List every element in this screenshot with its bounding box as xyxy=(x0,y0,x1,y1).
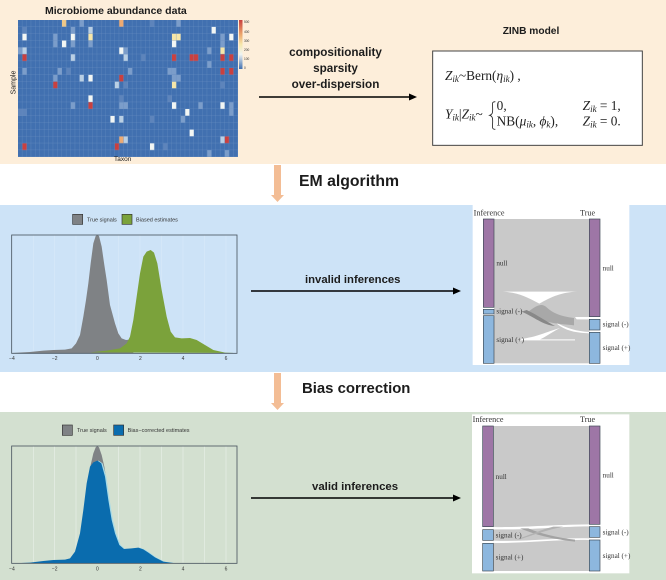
sankey: inference vs truth, valid: Inference xyxy=(473,415,504,424)
equation box: ZINB model: ik xyxy=(526,119,534,129)
equation box: ZINB model: Z xyxy=(583,113,591,128)
sankey: inference vs truth, invalid: True xyxy=(580,208,595,217)
density chart: true signals vs biased estimates: −2 xyxy=(52,356,58,362)
label: invalid inferences: invalid inferences xyxy=(305,274,400,286)
density chart: true signals vs biased estimates: 0 xyxy=(96,356,99,362)
heatmap colour legend: 200 xyxy=(244,48,250,52)
sankey: inference vs truth, valid: signal (+) xyxy=(603,552,631,560)
equation box: ZINB model: Z xyxy=(462,107,470,122)
sankey: inference vs truth, invalid: signal (-) xyxy=(603,321,629,329)
equation box: ZINB model: ) , xyxy=(510,68,521,83)
arrow: to valid inferences xyxy=(251,494,461,502)
sankey: inference vs truth, invalid: signal (-) xyxy=(496,308,523,316)
density chart: true signals vs bias-corrected estimates xyxy=(9,424,238,573)
label: data challenges: compositionality xyxy=(289,46,382,59)
equation box: ZINB model: , xyxy=(533,113,540,128)
equation box: ZINB model: ik xyxy=(452,113,460,123)
density chart: true signals vs bias-corrected estimates: 0 xyxy=(96,567,99,573)
heatmap x axis label: Taxon xyxy=(114,156,131,163)
equation box: ZINB model: ik xyxy=(590,104,598,114)
heatmap: sample by taxon abundance xyxy=(18,20,238,157)
arrow: down to EM algorithm xyxy=(271,165,284,202)
heading: bias correction: Bias correction xyxy=(302,381,410,397)
equation box: ZINB model: Z xyxy=(583,98,591,113)
legend: true signals and biased estimates: True signals xyxy=(87,217,117,223)
sankey: inference vs truth, invalid: null xyxy=(496,260,507,268)
panel: bias-corrected estimates xyxy=(0,412,666,580)
heatmap y axis label: Sample xyxy=(10,71,18,94)
label: valid inferences: valid inferences xyxy=(312,481,398,493)
sankey: inference vs truth, invalid: signal (+) xyxy=(603,344,631,352)
density chart: true signals vs bias-corrected estimates: −4 xyxy=(9,567,15,573)
equation box: ZINB model: ik xyxy=(503,74,511,84)
sankey: inference vs truth, invalid: null xyxy=(603,264,614,272)
density chart: true signals vs biased estimates xyxy=(9,214,238,362)
heatmap colour legend: 0 xyxy=(244,66,246,70)
equation box: ZINB model: = 0. xyxy=(597,113,621,128)
equation box: ZINB model: 0, xyxy=(497,98,507,113)
legend: true signals and biased estimates: Biased estimates xyxy=(136,217,178,223)
equation box: ZINB model: Z xyxy=(445,68,453,83)
equation box: ZINB model: ~Bern( xyxy=(459,68,497,83)
heatmap colour legend xyxy=(239,20,250,70)
equation box: ZINB model: | xyxy=(459,107,462,122)
equation box: ZINB model: NB(μ xyxy=(497,113,526,128)
equation box: ZINB model: Y xyxy=(445,107,454,122)
arrow: data to model xyxy=(259,94,417,100)
legend: true signals and biased estimates xyxy=(73,214,178,224)
density chart: true signals vs biased estimates: 6 xyxy=(225,356,228,362)
sankey: inference vs truth, valid: null xyxy=(496,473,507,481)
sankey: inference vs truth, valid: signal (-) xyxy=(496,531,522,539)
sankey: inference vs truth, valid: signal (-) xyxy=(603,529,629,537)
heading: microbiome abundance data: Microbiome abundance data xyxy=(45,5,187,17)
sankey: inference vs truth, valid: True xyxy=(580,415,595,424)
legend: true signals and bias-corrected estimates xyxy=(62,425,190,435)
panel: microbiome data and ZINB model xyxy=(0,0,666,164)
density chart: true signals vs bias-corrected estimates: −2 xyxy=(52,567,58,573)
panel: biased estimates xyxy=(0,205,666,372)
equation box: ZINB model: k xyxy=(546,119,551,129)
arrow: to invalid inferences xyxy=(251,288,461,294)
sankey: inference vs truth, invalid: Inference xyxy=(474,208,505,217)
equation box: ZINB model: ), xyxy=(550,113,558,128)
arrow: down to bias correction xyxy=(271,373,284,410)
density chart: true signals vs biased estimates: 2 xyxy=(139,356,142,362)
equation box: ZINB model: ik xyxy=(452,74,460,84)
heatmap colour legend: 500 xyxy=(244,20,250,24)
equation box: ZINB model: ~ xyxy=(476,107,483,122)
heading: ZINB model: ZINB model xyxy=(503,26,559,37)
heatmap colour legend: 300 xyxy=(244,39,250,43)
label: data challenges: over-dispersion xyxy=(292,78,379,91)
equation box: ZINB model: = 1, xyxy=(597,98,621,113)
equation box: ZINB model: ik xyxy=(469,113,477,123)
sankey: inference vs truth, valid: null xyxy=(603,472,614,480)
equation box: ZINB model: ik xyxy=(590,119,598,129)
density chart: true signals vs biased estimates: 4 xyxy=(182,356,185,362)
density chart: true signals vs bias-corrected estimates: 2 xyxy=(139,567,142,573)
density chart: true signals vs bias-corrected estimates: 6 xyxy=(225,567,228,573)
sankey: inference vs truth, valid: signal (+) xyxy=(496,553,524,561)
density chart: true signals vs bias-corrected estimates: 4 xyxy=(182,567,185,573)
equation box: ZINB model: ϕ xyxy=(540,113,547,128)
legend: true signals and bias-corrected estimates: True signals xyxy=(77,428,107,434)
label: data challenges: sparsity xyxy=(313,62,358,75)
sankey: inference vs truth, invalid: signal (+) xyxy=(496,336,525,344)
sankey: inference vs truth, valid xyxy=(472,414,631,574)
label: data challenges xyxy=(289,46,382,91)
heading: EM algorithm: EM algorithm xyxy=(299,173,399,190)
equation box: ZINB model xyxy=(432,50,643,146)
sankey: inference vs truth, invalid xyxy=(472,205,631,365)
heatmap colour legend: 400 xyxy=(244,30,250,34)
equation box: ZINB model: η xyxy=(496,68,503,83)
heatmap colour legend: 100 xyxy=(244,57,250,61)
density chart: true signals vs biased estimates: −4 xyxy=(9,356,15,362)
legend: true signals and bias-corrected estimates: Bias−corrected estimates xyxy=(128,428,190,434)
